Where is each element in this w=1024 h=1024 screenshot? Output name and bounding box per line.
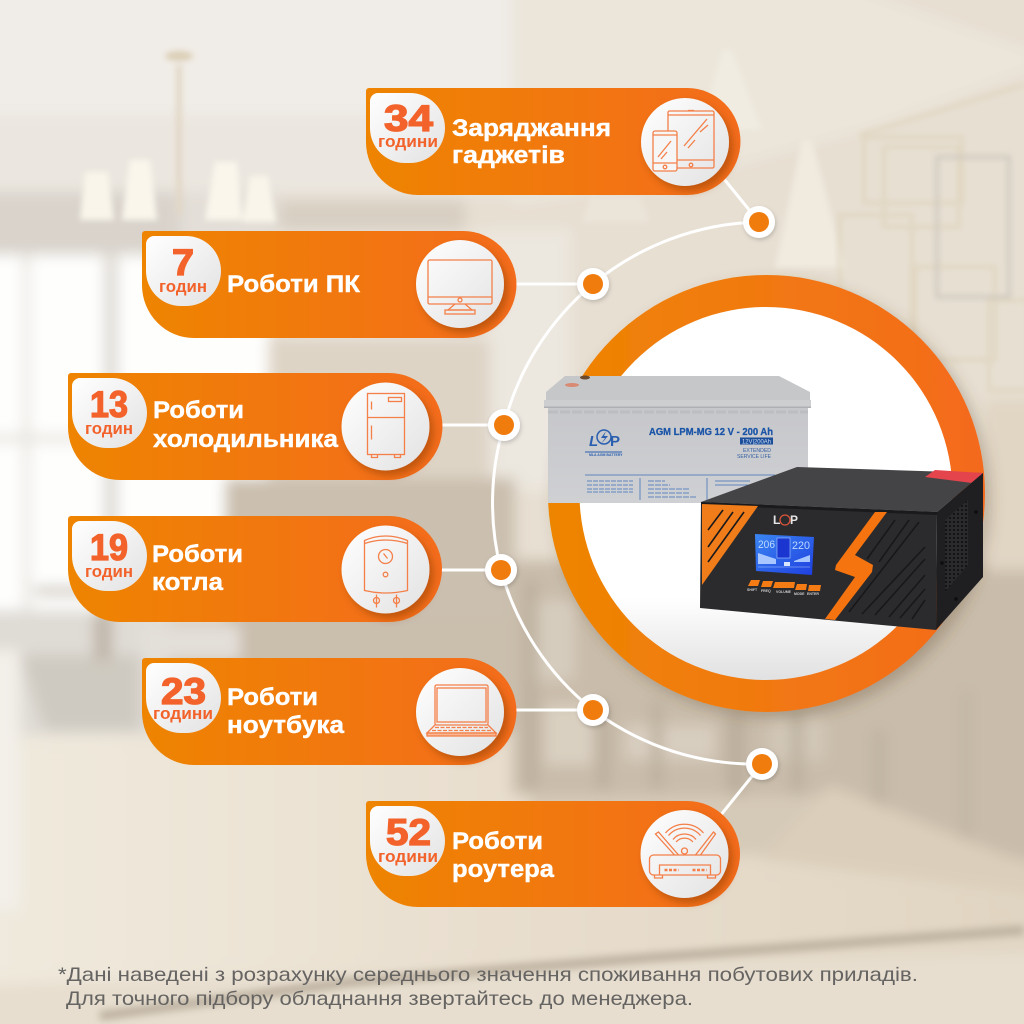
panel: laptop (142, 658, 516, 765)
icon: router (650, 824, 720, 878)
icon: tablet and phone (653, 110, 714, 171)
inverter orange panel (702, 504, 758, 585)
inverter logo: P (790, 513, 798, 527)
panel: router: години (378, 847, 438, 866)
connector arc and lines (441, 174, 762, 816)
inverter button labels: VOLUME (776, 590, 792, 594)
inverter lcd screen: 220 (792, 540, 810, 552)
inverter right slits (849, 520, 925, 619)
icon: monitor (428, 260, 492, 314)
inverter screws (940, 510, 978, 601)
icon: boiler (364, 536, 408, 608)
panel: router (366, 801, 740, 907)
panel: laptop: ноутбука (227, 712, 344, 739)
floor shadow stripe (100, 930, 1024, 1016)
panel: laptop: 23 (161, 671, 206, 712)
panel: boiler (68, 516, 442, 622)
inverter buttons (748, 580, 821, 591)
panel: laptop: години (153, 704, 213, 723)
battery logo: P (610, 433, 620, 450)
inverter lightning stripe (825, 512, 887, 620)
panel: refrigerator: Роботи (153, 397, 244, 424)
footnote: *Дані наведені з розрахунку середнього значення споживання побутових приладів. (58, 964, 918, 986)
panel: refrigerator: холодильника (153, 426, 338, 453)
panel: boiler: годин (85, 562, 133, 581)
chandelier and pendant lamps (80, 50, 845, 268)
panel: boiler: 19 (90, 527, 128, 568)
inverter button labels: ENTER (807, 592, 819, 596)
panel: charging gadgets: Заряджання (452, 115, 611, 142)
battery (544, 376, 811, 503)
panel: router: 52 (386, 812, 431, 853)
panel: PC: 7 (172, 242, 194, 283)
battery logo: L (589, 433, 598, 450)
inverter logo (773, 513, 798, 527)
decorative frames on the right wall (840, 85, 1024, 390)
battery logo: MLA AGM BATTERY (589, 453, 623, 457)
panel: boiler: котла (152, 569, 223, 596)
icon: refrigerator (368, 394, 404, 458)
panel: laptop: Роботи (227, 684, 318, 711)
inverter button labels: MODE (794, 592, 805, 596)
orange ring with white centre (548, 275, 985, 712)
footnote: Для точного підбору обладнання звертайтесь до менеджера. (66, 988, 693, 1010)
panel: PC (142, 231, 516, 338)
inverter button labels (747, 588, 819, 596)
inverter logo: L (773, 513, 780, 527)
icon: laptop (427, 685, 496, 736)
panel: refrigerator: 13 (90, 384, 128, 425)
battery: EXTENDED (743, 448, 771, 454)
panel: router: роутера (452, 856, 554, 883)
panel: refrigerator (68, 373, 442, 480)
nodes (485, 206, 778, 780)
panel: PC: годин (159, 277, 207, 296)
battery spec lines (585, 475, 775, 500)
panel: charging gadgets: 34 (384, 98, 434, 139)
battery logo (585, 430, 623, 457)
panel: boiler: Роботи (152, 541, 243, 568)
panel: router: Роботи (452, 828, 543, 855)
panel: refrigerator: годин (85, 419, 133, 438)
footnote (58, 964, 918, 1010)
panel: charging gadgets: години (378, 132, 438, 151)
battery: 12V|200Ah (742, 440, 771, 446)
inverter (700, 467, 983, 630)
battery model: AGM LPM-MG 12 V - 200 Ah (649, 426, 773, 438)
inverter button labels: FREQ (761, 589, 771, 593)
inverter button labels: SHIFT (747, 588, 758, 592)
panel: PC: Роботи ПК (227, 271, 360, 298)
battery: SERVICE LIFE (737, 454, 771, 460)
panel: charging gadgets (366, 88, 740, 195)
panel: charging gadgets: гаджетів (452, 142, 565, 169)
inverter lcd screen: 206 (758, 539, 775, 551)
inverter lcd screen (755, 534, 814, 575)
